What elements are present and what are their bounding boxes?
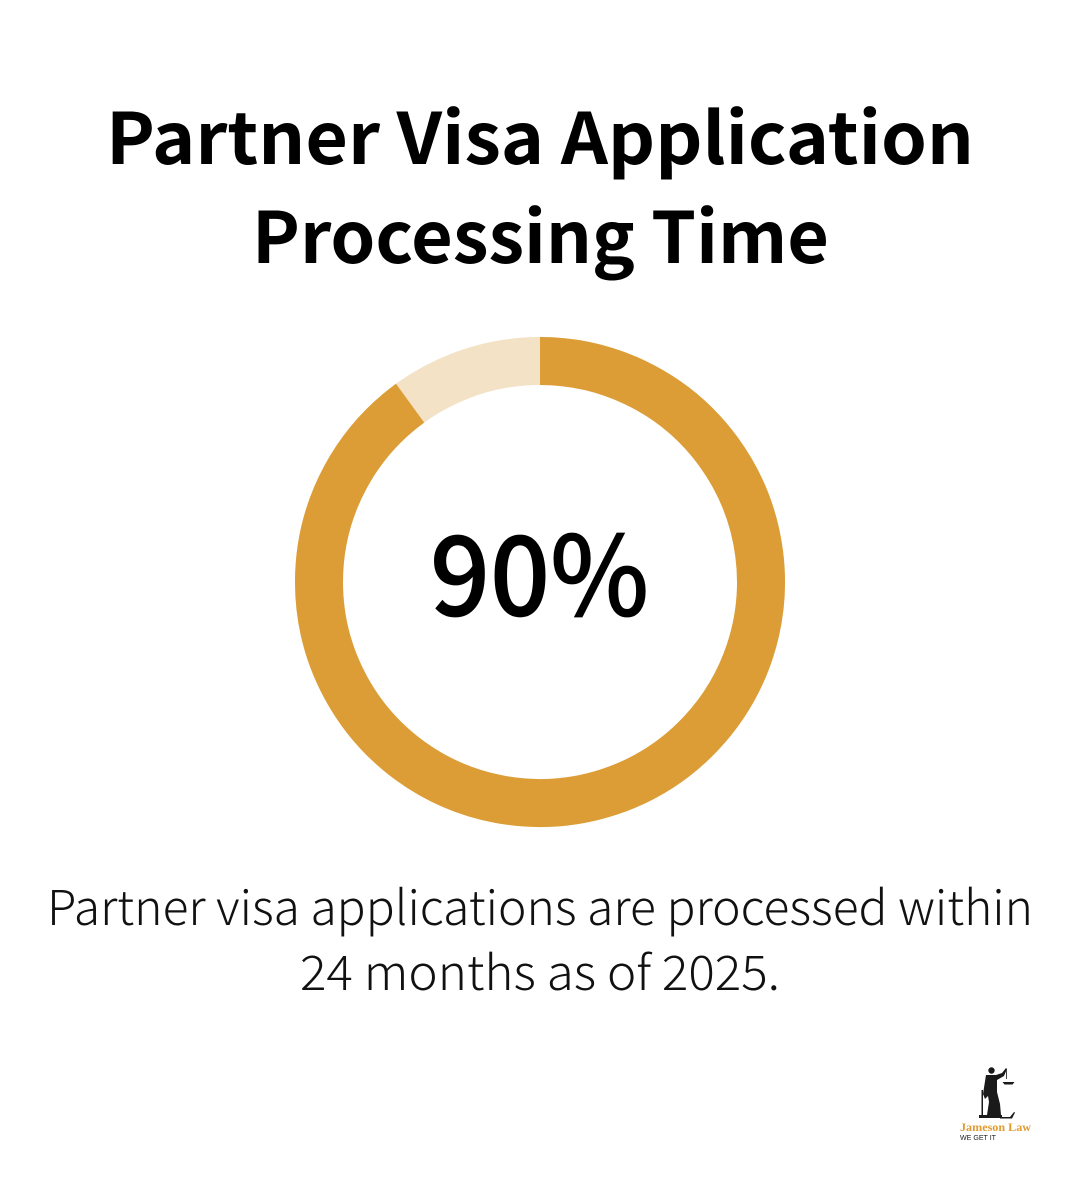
- description text: 24 months as of 2025.: [300, 934, 780, 1004]
- title: [106, 83, 974, 284]
- logo tagline: WE GET IT: [960, 1135, 997, 1142]
- center value: 90%: 90%: [430, 488, 649, 648]
- description text: Partner visa applications are processed within: [47, 869, 1033, 939]
- title: Processing Time: [252, 182, 829, 284]
- icon: lady justice figure: [979, 1067, 1015, 1118]
- logo name: Jameson Law: [960, 1122, 1032, 1134]
- donut value: 90% arc: [319, 361, 761, 803]
- logo: Jameson Law: [960, 1067, 1032, 1142]
- title: Partner Visa Application: [106, 83, 974, 185]
- donut chart: 90%: [319, 361, 761, 803]
- donut track: remaining 10%: [319, 361, 761, 803]
- description text: [47, 869, 1033, 1004]
